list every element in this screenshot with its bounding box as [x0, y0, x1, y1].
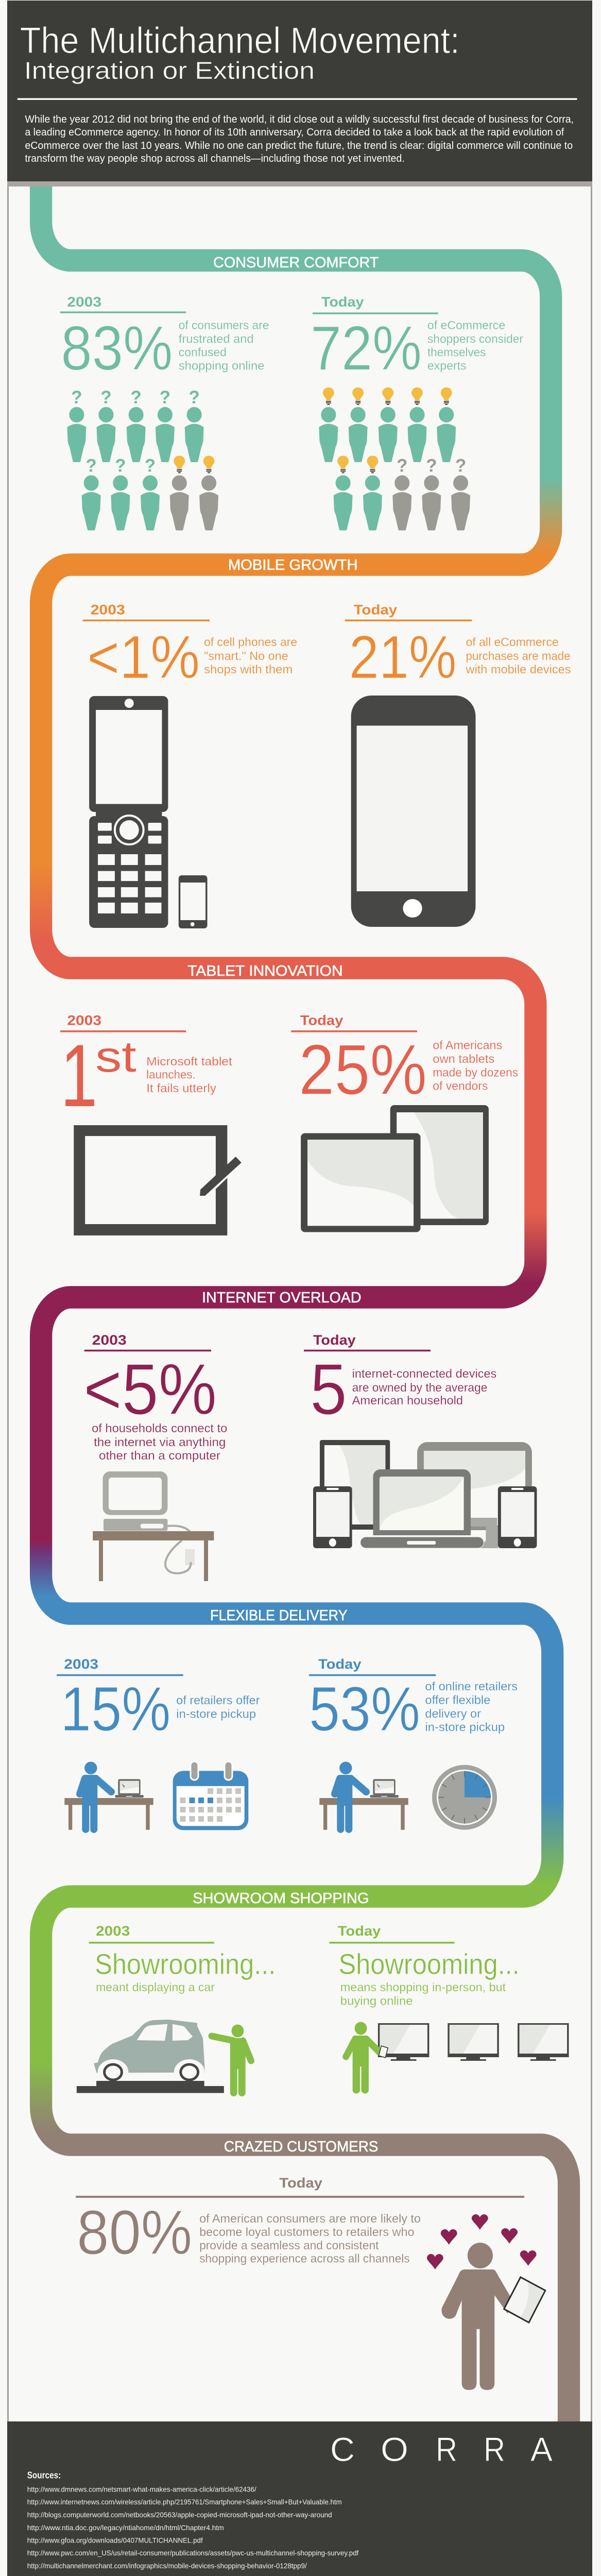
stat 53%: of online retailers [425, 1680, 518, 1693]
showrooming now: buying online [340, 1994, 413, 2007]
stat 1st: launches. [146, 1068, 196, 1081]
stat 72% [311, 313, 523, 383]
title: eCommerce over the last 10 years. While no one can predict the future, the trend is clear: digital commerce will continue to [25, 140, 573, 151]
people icons 2003: ? [160, 387, 170, 408]
icon: five connected devices [313, 1440, 537, 1548]
2003 heading [89, 1923, 214, 1943]
icon: person at desk 2003 [64, 1762, 153, 1833]
header panel [7, 1, 592, 187]
title: While the year 2012 did not bring the end of the world, it did close out a wildly successful first decade of business for Corra, [25, 114, 574, 125]
stat 80%: shopping experience across all channels [199, 2252, 410, 2265]
stat 1st: It fails utterly [146, 1081, 216, 1095]
stat 25%: of vendors [433, 1079, 488, 1093]
stat below 5%: the internet via anything [94, 1435, 226, 1449]
sources list: http://www.internetnews.com/wireless/article.php/2195761/Smartphone+Sales+Small+But+Valuable.htm [27, 2498, 342, 2506]
stat 25%: made by dozens [433, 1066, 518, 1079]
stat below 5%: <5% [83, 1349, 217, 1430]
stat 80% [77, 2197, 421, 2267]
icon: clock [435, 1767, 494, 1827]
stat 21% [349, 623, 571, 691]
connecting pipeline [41, 187, 569, 2422]
icon: person pointing at car [212, 2025, 251, 2096]
today heading [76, 2175, 524, 2198]
people icons 2003: ? [100, 387, 112, 408]
today heading: Today [354, 602, 397, 618]
stat 25%: own tablets [433, 1052, 494, 1065]
2003 heading [84, 1332, 211, 1351]
footer panel [7, 2421, 592, 2576]
icon: hearts [427, 2214, 537, 2269]
people icons 2003: ? [145, 455, 156, 476]
stat 83% [61, 313, 269, 383]
stat 53%: in-store pickup [425, 1720, 505, 1734]
panel: flexible delivery [57, 1656, 518, 1833]
people icons today: ? [426, 455, 437, 476]
stat 5 devices [310, 1349, 496, 1430]
section headings on the pipeline: TABLET INNOVATION [187, 963, 343, 979]
today heading: Today [300, 1013, 343, 1028]
sources list: http://www.gfoa.org/downloads/0407MULTICHANNEL.pdf [27, 2536, 203, 2545]
stat 80%: of American consumers are more likely to [199, 2212, 421, 2225]
icon: flip phone [89, 696, 168, 928]
stat 83%: frustrated and [179, 332, 254, 346]
stat 1st [60, 1027, 232, 1125]
stat 72%: shoppers consider [427, 332, 523, 346]
people icons 2003: ? [131, 387, 142, 408]
stat 72%: experts [427, 359, 467, 372]
corra logo: R [484, 2430, 505, 2468]
section headings on the pipeline: SHOWROOM SHOPPING [193, 1890, 369, 1907]
icon: person holding tablet [441, 2243, 545, 2390]
stat 21%: 21% [349, 623, 457, 691]
section headings on the pipeline: FLEXIBLE DELIVERY [210, 1607, 348, 1624]
sources list: http://www.ntia.doc.gov/legacy/ntiahome/dn/html/Chapter4.htm [27, 2523, 224, 2532]
people icons today [319, 387, 470, 531]
icon: calendar [173, 1761, 248, 1830]
2003 heading: 2003 [67, 294, 101, 310]
panel: consumer comfort [60, 294, 523, 531]
icon: 2003 tablet with stylus [74, 1125, 243, 1235]
panel: mobile growth [83, 602, 571, 928]
showrooming now [338, 1947, 520, 2007]
stat below 1% [87, 623, 297, 691]
2003 heading [60, 1013, 186, 1032]
stat below 5%: of households connect to [92, 1421, 227, 1435]
sources list: Sources: [27, 2470, 61, 2481]
sources list: http://www.dmnews.com/netsmart-what-makes-america-click/article/62436/ [27, 2485, 256, 2494]
stat 5 devices: 5 [310, 1349, 347, 1430]
today heading: Today [279, 2175, 322, 2191]
panel: internet overload [83, 1332, 537, 1581]
icon: person with phone [346, 2022, 388, 2094]
showrooming then: meant displaying a car [96, 1980, 215, 1994]
panel: showroom shopping [77, 1923, 569, 2096]
panel: crazed customers [76, 2175, 545, 2390]
icon: three monitors [378, 2023, 569, 2061]
2003 heading: 2003 [96, 1923, 130, 1939]
showrooming now: Showrooming... [338, 1947, 520, 1980]
title: a leading eCommerce agency. In honor of its 10th anniversary, Corra decided to take a look back at the rapid evolution of [25, 127, 564, 138]
section headings on the pipeline [187, 255, 379, 2155]
section headings on the pipeline: INTERNET OVERLOAD [202, 1290, 362, 1306]
corra logo: O [381, 2430, 408, 2468]
icon: desktop computer on desk [93, 1471, 214, 1581]
2003 heading: 2003 [92, 1332, 127, 1348]
stat below 1%: shops with them [204, 663, 293, 676]
icon: person at desk today [319, 1762, 408, 1833]
stat 83%: 83% [61, 313, 173, 383]
stat 83%: of consumers are [179, 318, 269, 332]
stat 15%: 15% [60, 1674, 170, 1744]
stat 72%: themselves [427, 346, 486, 359]
people icons 2003 [67, 387, 218, 531]
stat 5 devices: are owned by the average [352, 1381, 487, 1394]
stat 21%: purchases are made [466, 649, 571, 663]
stat 21%: of all eCommerce [466, 635, 559, 649]
today heading: Today [338, 1923, 381, 1939]
today heading [345, 602, 472, 621]
title: Integration or Extinction [24, 57, 315, 84]
people icons today: ? [455, 455, 466, 476]
showrooming then [95, 1947, 276, 1994]
sources list [27, 2470, 383, 2576]
2003 heading [83, 602, 210, 621]
2003 heading: 2003 [91, 602, 125, 618]
people icons today: ? [397, 455, 407, 476]
icon: large smartphone [351, 696, 475, 927]
stat 80%: 80% [77, 2197, 192, 2267]
sources list: http://multichannelmerchant.com/infographics/mobile-devices-shopping-behavior-0128tpp9/ [27, 2562, 307, 2570]
people icons 2003: ? [189, 387, 200, 408]
section headings on the pipeline: CONSUMER COMFORT [213, 255, 379, 271]
2003 heading: 2003 [64, 1656, 98, 1672]
today heading [309, 1656, 436, 1676]
corra logo: R [436, 2430, 457, 2468]
stat 53%: 53% [309, 1674, 420, 1744]
stat 72%: 72% [311, 313, 422, 383]
stat 15% [60, 1674, 260, 1744]
stat 83%: confused [179, 346, 227, 359]
stat 80%: provide a seamless and consistent [199, 2239, 379, 2252]
showrooming now: means shopping in-person, but [340, 1980, 506, 1994]
stat 53% [309, 1674, 518, 1744]
section headings on the pipeline: CRAZED CUSTOMERS [224, 2139, 378, 2155]
today heading: Today [313, 1332, 356, 1348]
sources list: http://www.pwc.com/en_US/us/retail-consumer/publications/assets/pwc-us-multichannel-shopping-survey.pdf [27, 2549, 358, 2557]
people icons 2003: ? [85, 455, 97, 476]
sources list: http://blogs.computerworld.com/netbooks/20563/apple-copied-microsoft-ipad-not-other-way-around [27, 2511, 332, 2519]
stat 80%: become loyal customers to retailers who [199, 2225, 415, 2239]
stat 1st: Microsoft tablet [146, 1055, 232, 1068]
2003 heading [57, 1656, 183, 1676]
section headings on the pipeline: MOBILE GROWTH [228, 557, 358, 573]
stat 53%: offer flexible [425, 1693, 490, 1707]
people icons 2003: ? [71, 387, 82, 408]
people icons 2003: ? [115, 455, 126, 476]
stat below 5%: other than a computer [99, 1449, 220, 1462]
stat below 1%: <1% [87, 623, 200, 691]
panel: tablet innovation [60, 1013, 518, 1235]
title: transform the way people shop across all channels—including those not yet invented. [25, 153, 405, 164]
stat 53%: delivery or [425, 1707, 481, 1720]
showrooming then: Showrooming... [95, 1947, 276, 1980]
today heading [313, 294, 438, 314]
stat 72%: of eCommerce [427, 318, 505, 332]
stat 5 devices: American household [352, 1394, 463, 1407]
title: The Multichannel Movement: [20, 21, 460, 61]
title [18, 21, 577, 164]
stat below 1%: "smart." No one [204, 649, 288, 663]
today heading: Today [318, 1656, 362, 1672]
corra logo [330, 2430, 553, 2468]
today heading [329, 1923, 455, 1943]
2003 heading: 2003 [67, 1013, 101, 1028]
icon: small smartphone [179, 875, 208, 928]
corra logo: C [330, 2430, 355, 2468]
stat below 1%: of cell phones are [204, 635, 297, 649]
stat 21%: with mobile devices [466, 663, 571, 676]
2003 heading [60, 294, 186, 313]
corra logo: A [530, 2430, 553, 2468]
icon: two modern tablets [301, 1105, 489, 1232]
stat 5 devices: internet-connected devices [352, 1367, 496, 1380]
today heading [304, 1332, 431, 1351]
stat 1st: 1 [60, 1027, 97, 1125]
stat 1st: st [95, 1032, 136, 1081]
stat 25%: 25% [299, 1030, 427, 1110]
stat 15%: of retailers offer [176, 1693, 260, 1707]
today heading: Today [321, 294, 364, 310]
stat 15%: in-store pickup [176, 1707, 256, 1721]
stat 83%: shopping online [179, 359, 264, 372]
today heading [291, 1013, 417, 1032]
icon: car on platform [77, 2020, 224, 2093]
stat 25%: of Americans [433, 1038, 502, 1052]
stat 25% [299, 1030, 518, 1110]
